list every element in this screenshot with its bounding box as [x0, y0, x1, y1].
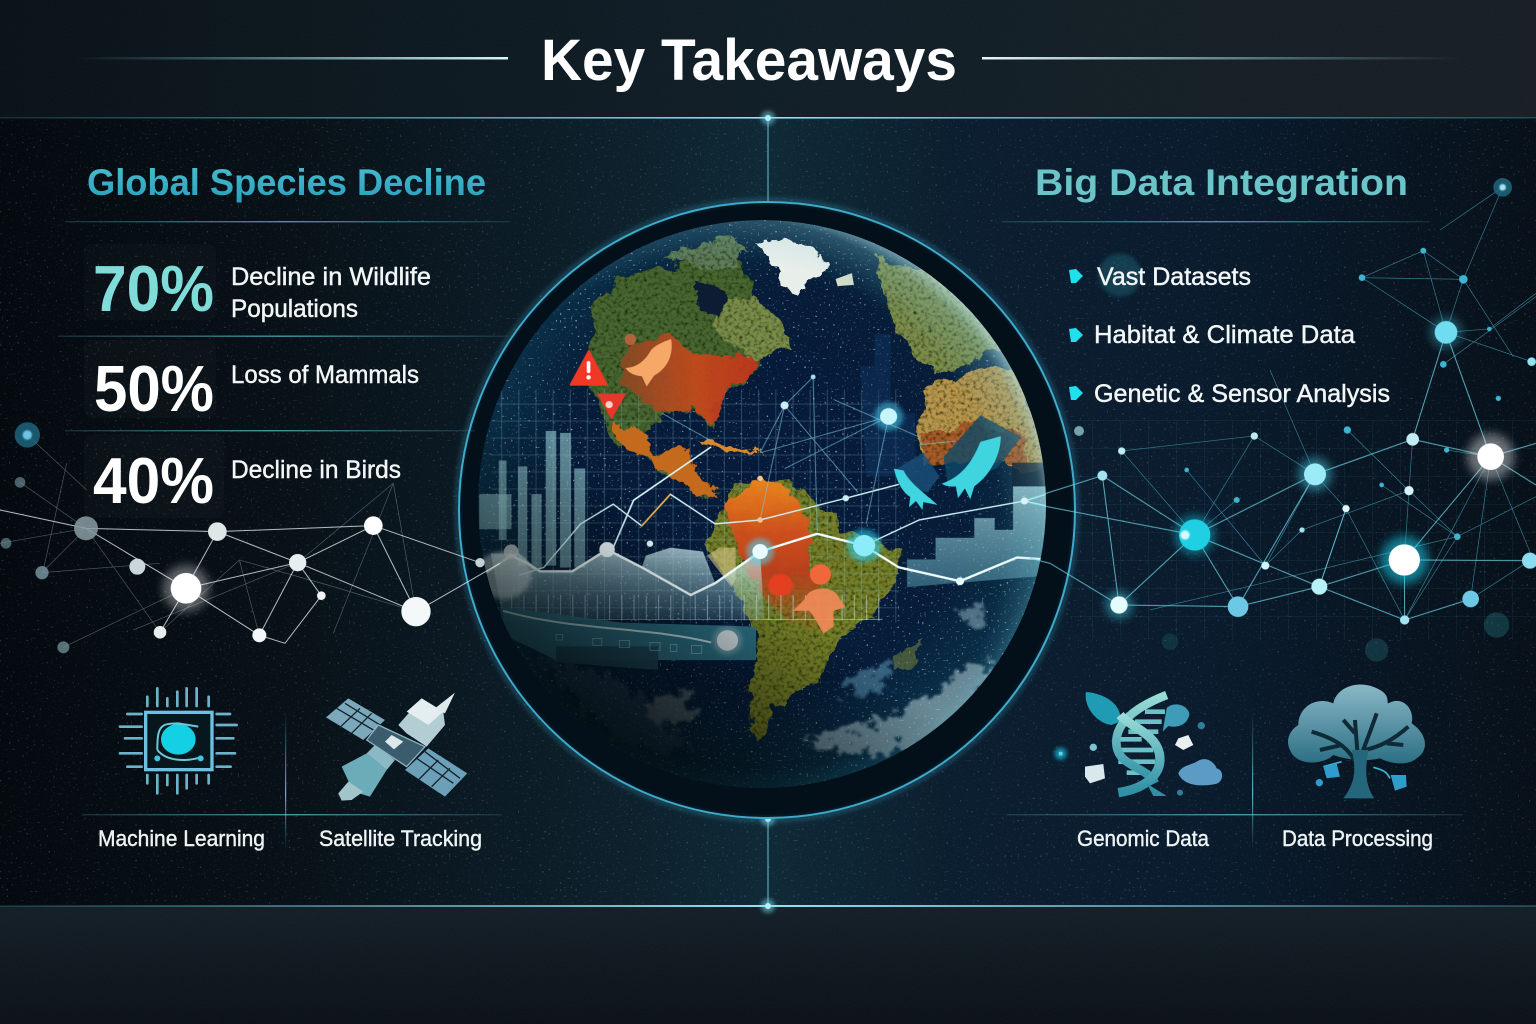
stat: 40 percent: [84, 434, 401, 518]
label: Loss of Mammals: [231, 361, 419, 389]
title text: Key Takeaways: [541, 28, 957, 93]
panel: big data integration: [1002, 162, 1430, 408]
icon: machine learning chip: [120, 688, 237, 793]
globe ring: [459, 202, 1075, 818]
heading: Big Data Integration: [1035, 162, 1408, 203]
panel: global species decline: [58, 162, 510, 518]
stat: 50 percent: 50%: [94, 352, 214, 425]
icon: orange bird: [625, 339, 672, 386]
stat: 50 percent: [84, 340, 419, 425]
bullet: vast datasets: Vast Datasets: [1097, 263, 1251, 291]
bullet: habitat and climate: Habitat & Climate Data: [1094, 321, 1355, 349]
label: Decline in Wildlife: [231, 263, 431, 291]
icon: person: [793, 564, 846, 634]
network: right: [1030, 178, 1536, 662]
title rule right: [982, 57, 1462, 60]
steps dark: [860, 334, 915, 476]
bottom data panel: [503, 607, 756, 670]
icon: satellite: [326, 693, 467, 801]
chart lines: [486, 378, 1046, 596]
icon: alert triangle: [570, 351, 607, 385]
label: Satellite Tracking: [319, 826, 482, 851]
stat: 70 percent: [84, 244, 431, 325]
stat: 40 percent: 40%: [93, 444, 214, 517]
icon: genomic dna: [1055, 692, 1222, 796]
globe nodes: [504, 375, 1028, 655]
label: [231, 263, 431, 323]
globe: [450, 200, 1090, 820]
bar chart: [479, 431, 585, 569]
panel: left tools: [82, 688, 502, 851]
label: Machine Learning: [98, 826, 265, 851]
network: left: [0, 422, 500, 653]
label: Genomic Data: [1077, 826, 1210, 851]
title rule left: [75, 57, 508, 60]
icon: location pin: [597, 334, 636, 420]
land masses: [589, 240, 1046, 741]
globe body: [478, 220, 1046, 788]
glow spot: [474, 552, 532, 599]
hotspot: north america: [621, 334, 758, 425]
bullet: genetic and sensor: Genetic & Sensor Analysis: [1094, 380, 1390, 408]
data grid: [491, 390, 899, 623]
hudson bay: [695, 281, 727, 318]
panel: right tools: [1007, 685, 1463, 851]
hotspot: mexico: [611, 421, 719, 496]
stat: 70 percent: 70%: [93, 252, 214, 325]
hotspot: south america: [724, 478, 820, 628]
icon: data processing tree: [1288, 685, 1425, 798]
heading: Global Species Decline: [87, 162, 486, 203]
cloud banks: [532, 603, 989, 757]
globe rim light: [582, 220, 1046, 689]
greenland ice: [756, 240, 829, 297]
label: Decline in Birds: [231, 456, 401, 484]
icon: teal birds: [894, 415, 1021, 510]
label: Populations: [231, 295, 358, 323]
steps chart: [907, 486, 1051, 587]
area chart: [491, 548, 764, 619]
label: Data Processing: [1282, 826, 1433, 851]
frame lines: [0, 111, 1536, 913]
